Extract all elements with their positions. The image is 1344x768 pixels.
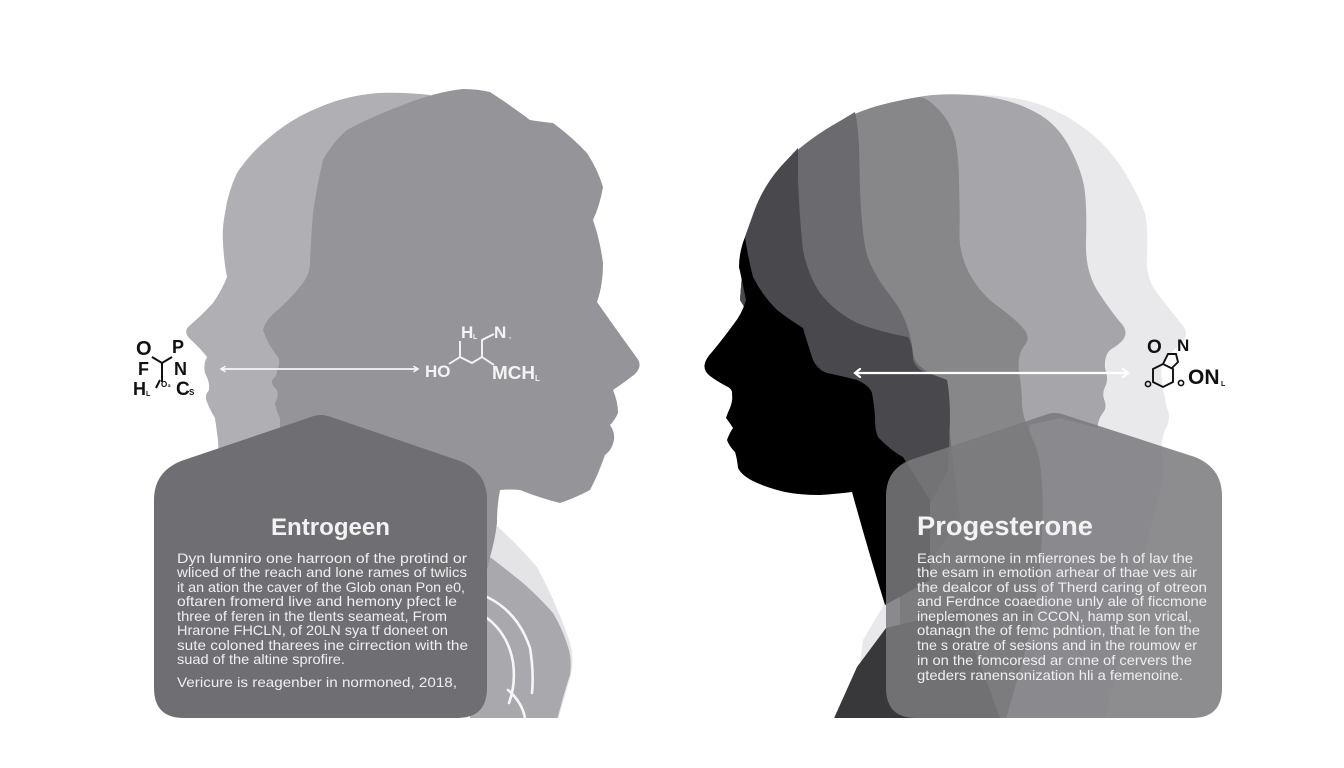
text block: Progesterone description: and Ferdnce coaedione unly ale of ficcmone xyxy=(917,593,1207,609)
double arrow: right figure xyxy=(855,369,1128,377)
molecule: right black formula: N xyxy=(1177,336,1189,355)
light shoulder shape xyxy=(470,557,571,718)
molecule: left black formula: O₃ xyxy=(161,380,171,389)
molecule: white formula on head: H xyxy=(461,323,473,342)
text block: Progesterone description: gteders ranensonization hli a femenoine. xyxy=(917,667,1183,683)
molecule: left black formula: O xyxy=(136,338,152,360)
right figure: layered head silhouettes xyxy=(704,94,1186,745)
molecule: left black formula: L xyxy=(146,391,151,398)
molecule: left black formula: C xyxy=(176,379,190,400)
text block: Entrogeen description: three of feren in the tlents seameat, From xyxy=(177,608,447,624)
molecule: white formula on head: HO xyxy=(425,362,450,381)
molecule: white formula on head: N xyxy=(494,323,506,342)
black head silhouette xyxy=(704,237,930,605)
text block: Progesterone description: in on the fomcoresd ar cnne of cervers the xyxy=(917,652,1192,668)
molecule: white formula on head: , xyxy=(509,333,511,340)
molecule: right black formula: O xyxy=(1147,337,1162,358)
grey head layer xyxy=(740,112,951,447)
molecule: right black formula: ON xyxy=(1188,366,1220,389)
molecule: right black formula: L xyxy=(1221,381,1226,388)
text block: Entrogeen description xyxy=(176,550,468,690)
text block: Progesterone description: otanagn the of femc pdntion, that le fon the xyxy=(917,622,1200,638)
molecule: white formula on head: L xyxy=(535,374,540,383)
text block: Progesterone description: ineplemones an in CCON, hamp son vrical, xyxy=(917,608,1192,624)
dark head layer xyxy=(740,148,950,462)
molecule: left black formula xyxy=(133,337,195,400)
text block: Entrogeen description: Vericure is reagenber in normoned, 2018, xyxy=(177,674,457,690)
double arrow: left figure xyxy=(221,366,418,372)
text block: Entrogeen description: oftaren fromerd live and hemony pfect le xyxy=(177,593,457,609)
panel shape xyxy=(154,415,487,718)
mid grey head layer xyxy=(740,97,1043,740)
dark head silhouette xyxy=(263,89,640,600)
lightest head layer xyxy=(860,94,1186,662)
text block: Progesterone description: tne s oratre of sesions and in the roumow er xyxy=(917,637,1197,653)
text block: Progesterone description: the esam in emotion arhear of thae ves air xyxy=(917,564,1197,580)
text block: Entrogeen description: wliced of the reach and lone rames of twlics xyxy=(176,564,467,580)
light grey head layer xyxy=(740,94,1126,431)
text block: Entrogeen description: suad of the altine sprofire. xyxy=(177,651,345,667)
text block: Entrogeen description: Hrarone FHCLN, of 20LN sya tf doneet on xyxy=(177,622,448,638)
left figure: overlapping head silhouettes xyxy=(186,89,640,740)
heading: Progesterone: Progesterone xyxy=(917,511,1093,541)
molecule: white formula on head xyxy=(425,323,540,383)
molecule: right black formula xyxy=(1145,336,1226,389)
molecule: left black formula: N xyxy=(174,359,187,379)
heading: Entrogeen: Entrogeen xyxy=(271,514,390,541)
icon: white curved arcs on shoulder xyxy=(487,597,533,718)
molecule: left black formula: F xyxy=(138,359,149,379)
molecule: left black formula: P xyxy=(172,337,184,357)
text block: Entrogeen description: sute coloned tharees ine cirrection with the xyxy=(177,637,468,653)
molecule: white formula on head: L xyxy=(473,334,478,341)
molecule: left black formula: H xyxy=(133,379,146,399)
panel: Progesterone xyxy=(886,413,1222,718)
text block: Entrogeen description: Dyn lumniro one harroon of the protind or xyxy=(177,550,467,566)
text block: Progesterone description: the dealcor of uss of Therd caring of otreon xyxy=(917,579,1207,595)
neck highlight band xyxy=(490,526,572,718)
light head silhouette xyxy=(186,92,430,448)
molecule: left black formula: S xyxy=(189,388,195,397)
text block: Progesterone description xyxy=(917,550,1207,683)
panel shape xyxy=(886,413,1222,718)
panel: Entrogeen xyxy=(154,415,487,718)
text block: Progesterone description: Each armone in mfierrones be h of lav the xyxy=(917,550,1193,566)
molecule: white formula on head: MCH xyxy=(492,363,535,383)
text block: Entrogeen description: it an ation the caver of the Glob onan Pon e0, xyxy=(177,579,465,595)
dark lower wedge xyxy=(834,610,1000,718)
